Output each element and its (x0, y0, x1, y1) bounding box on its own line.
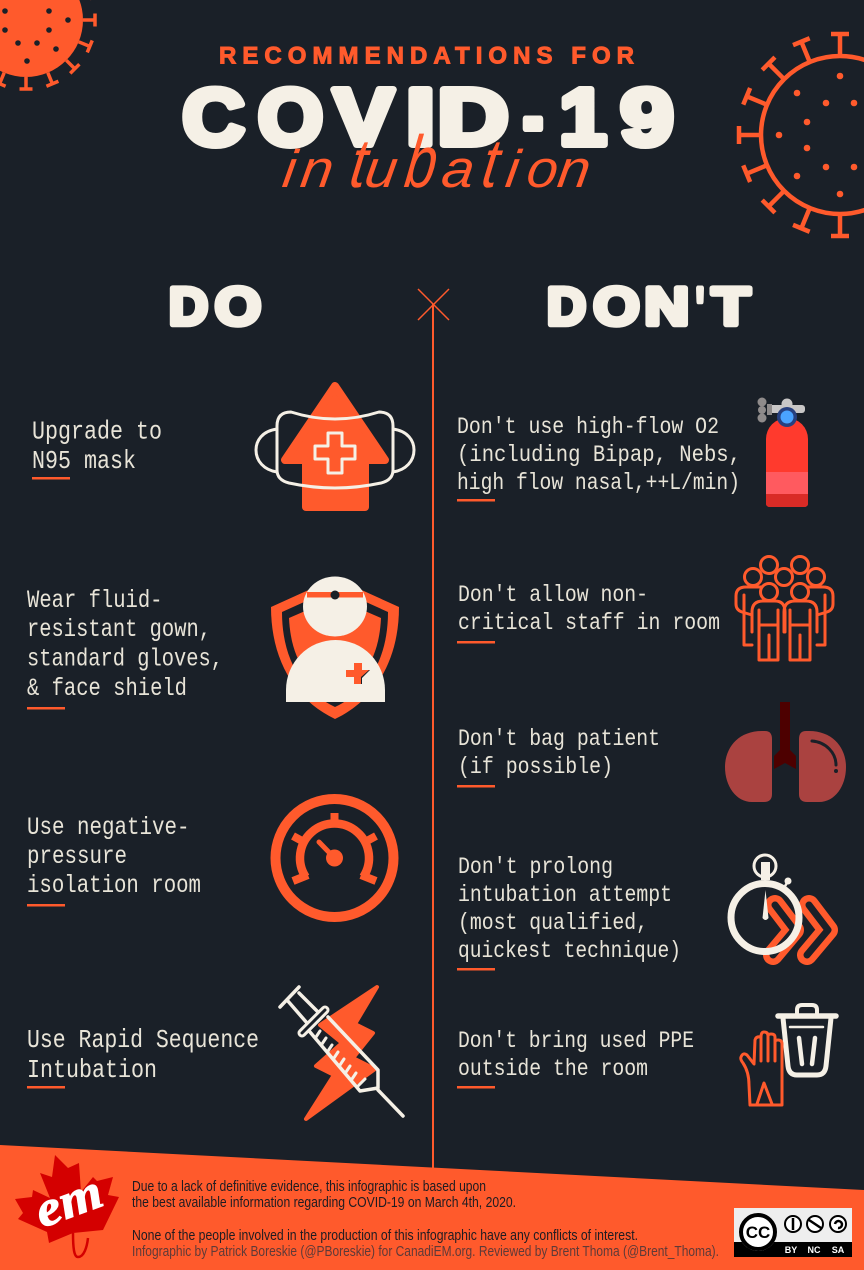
icon: mask over up arrow (256, 386, 414, 507)
footer note: Due to a lack of definitive evidence, this infographic is based upon (132, 1179, 486, 1195)
don't item: used ppe text: outside the room (458, 1056, 648, 1083)
do item: protective gear text: Wear fluid- (27, 586, 162, 615)
don't item: used ppe text: Don't bring used PPE (458, 1028, 694, 1055)
title script: i (279, 139, 302, 198)
title script: n (554, 139, 595, 198)
don't item: high flow text (457, 414, 741, 502)
title script: o (523, 139, 562, 199)
do item: protective gear text (27, 586, 223, 710)
title (182, 72, 674, 162)
don't item: bagging text: (if possible) (458, 754, 613, 781)
icon: trash can (778, 1005, 836, 1075)
heading: do: O (215, 278, 261, 336)
logo: canadiem maple leaf (15, 1155, 119, 1257)
heading: do: D (169, 278, 208, 336)
do item: rapid sequence text: Use Rapid Sequence (27, 1025, 259, 1055)
don't item: prolonged attempt text: (most qualified, (458, 910, 648, 937)
don't item: staff text (457, 582, 720, 644)
heading: do (169, 278, 261, 336)
title script: a (438, 139, 479, 198)
heading: don't: ' (696, 278, 704, 336)
do item: rapid sequence text: Intubation (27, 1055, 157, 1085)
logo: canadiem maple leaf: em (27, 1162, 110, 1238)
icon: stopwatch with chevrons (731, 855, 828, 955)
icon: syringe and lightning bolt (280, 987, 403, 1119)
badge: creative commons: SA (832, 1245, 845, 1255)
title: I (406, 72, 435, 162)
title script: t (346, 124, 375, 202)
badge: creative commons: BY (785, 1245, 797, 1255)
don't item: prolonged attempt text: intubation attempt (458, 882, 672, 909)
do item: n95 text: Upgrade to (32, 416, 162, 446)
icon: group of people (736, 556, 833, 660)
icon: outlined virus top right (739, 34, 864, 236)
don't item: staff text: critical staff in room (458, 610, 720, 637)
title: - (523, 72, 543, 162)
title: C (182, 72, 244, 162)
do item: negative pressure text: pressure (27, 842, 127, 871)
title script: t (478, 124, 507, 202)
title: 9 (620, 72, 674, 162)
do item: rapid sequence text (27, 1025, 259, 1088)
title script: i (502, 139, 525, 198)
don't item: prolonged attempt text: Don't prolong (458, 854, 613, 881)
don't item: high flow text: high flow nasal,++L/min) (457, 470, 740, 497)
badge: creative commons (734, 1208, 852, 1257)
do item: negative pressure text: Use negative- (27, 813, 190, 842)
don't item: high flow text: Don't use high-flow O2 (457, 414, 719, 441)
icon: nurse with shield (271, 576, 399, 719)
title script (279, 121, 595, 203)
don't item: prolonged attempt text (457, 854, 681, 970)
do item: n95 text: N95 mask (32, 446, 136, 476)
title script: b (401, 121, 443, 203)
don't item: staff text: Don't allow non- (458, 582, 648, 609)
don't item: used ppe text (457, 1028, 694, 1088)
icon: pressure gauge (276, 799, 394, 917)
icon: filled virus top left (0, 0, 95, 89)
footer note: the best available information regarding COVID-19 on March 4th, 2020. (132, 1195, 516, 1211)
badge: creative commons: CC (746, 1223, 770, 1242)
title kicker: RECOMMENDATIONS FOR (219, 42, 634, 70)
footer note: None of the people involved in the production of this infographic have any conflicts of interest. (132, 1228, 638, 1244)
heading: don't: N (644, 278, 689, 336)
icon: rubber glove (741, 1032, 782, 1105)
do item: protective gear text: standard gloves, (27, 644, 223, 674)
do item: negative pressure text: isolation room (27, 871, 201, 900)
don't item: bagging text: Don't bag patient (458, 726, 660, 753)
footer band (0, 1145, 864, 1270)
do item: negative pressure text (27, 813, 201, 906)
title: D (438, 72, 508, 162)
title script: n (297, 139, 338, 198)
don't item: prolonged attempt text: quickest technique) (458, 938, 681, 965)
title script: u (361, 139, 402, 198)
don't item: bagging text (457, 726, 660, 788)
column divider (418, 289, 449, 1170)
heading: don't (547, 278, 750, 336)
heading: don't: T (712, 278, 750, 336)
do item: n95 text (32, 416, 162, 480)
badge: creative commons: NC (808, 1245, 821, 1255)
do item: protective gear text: & face shield (27, 674, 187, 703)
footer note (132, 1179, 719, 1260)
title: O (258, 72, 323, 162)
footer note: Infographic by Patrick Boreskie (@PBoreskie) for CanadiEM.org. Reviewed by Brent Thoma (@Brent_Thoma). (132, 1244, 719, 1260)
icon: oxygen tank (758, 398, 808, 507)
do item: protective gear text: resistant gown, (27, 615, 211, 644)
icon: lungs (725, 702, 846, 802)
title: 1 (560, 72, 606, 162)
heading: don't: O (594, 278, 640, 336)
title: V (334, 72, 394, 162)
heading: don't: D (547, 278, 586, 336)
don't item: high flow text: (including Bipap, Nebs, (457, 442, 741, 469)
